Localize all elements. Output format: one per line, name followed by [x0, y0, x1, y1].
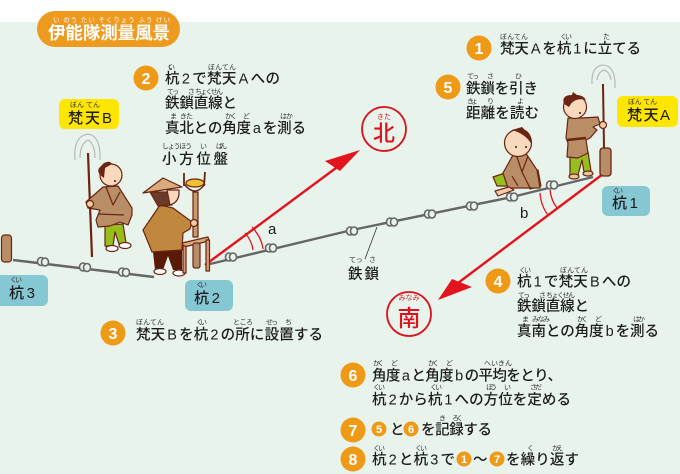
south circle: みなみ [398, 294, 420, 302]
south circle: 南 [398, 305, 420, 331]
step 2: ど [243, 112, 250, 120]
step 6: かく [373, 360, 384, 368]
label: stake 3 [0, 275, 48, 306]
figure: seated man with chain [493, 127, 541, 196]
label: bonten A: 梵天A [627, 107, 670, 124]
figure: surveyor with compass [143, 172, 210, 276]
chain label with leader: さ [369, 256, 376, 264]
step 8: かえ [552, 444, 563, 452]
label: stake 2: 杭 2 [194, 290, 220, 307]
chain label with leader: てっ [349, 257, 363, 264]
step 5: 鉄鎖を引き [466, 80, 538, 98]
step 5: よ [517, 98, 524, 106]
label: stake 1: くい [612, 187, 623, 195]
stake 3 [2, 235, 12, 262]
step 5: きょ [467, 98, 478, 106]
figure: man holding bonten B [75, 134, 132, 257]
south circle [387, 292, 431, 336]
step 8: 1 [461, 454, 467, 466]
angle b arcs [540, 190, 557, 215]
step 1 [466, 33, 641, 60]
step 5: 5 [444, 80, 453, 97]
step 8: を繰り返す [506, 452, 579, 468]
step 4 [486, 266, 659, 340]
step 4: 真南との角度bを測る [517, 322, 659, 340]
step 8: くい [415, 444, 427, 452]
step 2: かく [225, 112, 237, 120]
step 4: くい [519, 266, 531, 274]
step 5: てっ [467, 74, 479, 80]
step 3: ぼんてん [136, 318, 164, 326]
step 4: ど [595, 316, 602, 324]
step 4: みなみ [532, 316, 550, 324]
label: bonten B [59, 99, 119, 129]
label: stake 1 [602, 186, 650, 216]
step 2: 真北との角度aを測る [165, 119, 306, 137]
north circle: 北 [373, 121, 395, 146]
label: stake 3: 杭 3 [9, 285, 35, 302]
step 5: 距離を読む [466, 105, 539, 122]
label: stake 3: くい [10, 276, 22, 284]
step 4: ま [522, 316, 529, 324]
angle label b: b [520, 205, 528, 222]
step 5 [436, 72, 539, 122]
step 7 [340, 414, 492, 442]
step 6: ど [446, 360, 453, 368]
step 4: さ [539, 292, 546, 300]
step 7: 7 [349, 423, 358, 440]
red arrow to north [205, 150, 360, 265]
step 3: くい [196, 318, 207, 326]
step 3: ところ [233, 318, 253, 326]
north circle: きた [377, 113, 391, 121]
step 8: くい [373, 444, 385, 452]
label: stake 2: くい [196, 281, 207, 289]
step 6: 杭2から杭1への方位を定める [372, 392, 571, 408]
step 8: く [527, 444, 534, 452]
step 4: ぼんてん [560, 266, 588, 274]
step 3: ち [285, 318, 292, 326]
step 6: ほう [486, 384, 497, 392]
step 3 [100, 318, 323, 346]
title badge: い のう たい そくりょう ふう けい [53, 16, 170, 24]
label: compass: ばん [216, 142, 227, 150]
angle label a: a [268, 221, 277, 238]
chain label with leader: 鉄鎖 [348, 266, 380, 283]
step 8: 7 [494, 454, 500, 466]
step 6 [340, 360, 571, 408]
step 1: 梵天Aを杭1に立てる [500, 40, 641, 58]
step 6: へいきん [484, 360, 512, 368]
step 6: 6 [349, 368, 358, 385]
step 2: 鉄鎖直線と [165, 95, 237, 112]
title badge: 伊能隊測量風景 [48, 23, 170, 43]
step 7: 5 [376, 424, 382, 436]
step 2: 2 [142, 71, 151, 88]
step 7: と [390, 422, 404, 438]
step 2: ちょくせん [195, 88, 223, 96]
step 2: きた [180, 112, 193, 120]
step 2: はか [280, 112, 293, 120]
step 2: てっ [167, 89, 179, 96]
step 6: さだ [530, 384, 542, 392]
step 6: くい [430, 384, 442, 392]
step 4: 鉄鎖直線と [517, 298, 589, 315]
angle a arcs [245, 227, 263, 250]
chain: left section [13, 258, 154, 277]
chain: main section [210, 177, 593, 264]
step 1: ぼんてん [500, 33, 528, 41]
step 6: 角度aと角度bの平均をとり、 [372, 368, 562, 384]
step 4: かく [577, 316, 588, 324]
step 7: を記録する [421, 422, 492, 438]
step 6: い [504, 384, 511, 392]
step 1: くい [560, 33, 572, 41]
north circle [362, 107, 406, 151]
step 3: 梵天Bを杭2の所に設置する [136, 326, 323, 344]
step 6: かく [428, 360, 439, 368]
chain label with leader [348, 227, 380, 283]
step 6: くい [373, 384, 385, 392]
step 7: き [439, 414, 446, 422]
label: bonten A [617, 96, 678, 127]
label: compass: い [200, 142, 207, 150]
step 2: 杭2で梵天Aへの [165, 70, 280, 88]
label: bonten B: ぼん てん [70, 101, 100, 109]
step 5: さ [487, 72, 494, 80]
red arrow to south [438, 174, 603, 300]
step 8: 杭2と杭3で [372, 452, 455, 468]
step 8: 8 [349, 452, 358, 469]
step 2 [134, 64, 306, 137]
step 2: ぼんてん [208, 64, 236, 72]
step 1: た [603, 33, 610, 41]
label: bonten A: ぼん てん [628, 98, 657, 106]
step 3: 3 [109, 326, 118, 343]
step 2: ま [170, 112, 177, 120]
label: bonten B: 梵天B [68, 110, 112, 127]
step 7: 6 [408, 424, 414, 436]
label: compass: 小方位盤 [162, 151, 228, 168]
step 2: さ [188, 88, 195, 96]
label: compass [162, 142, 228, 168]
title badge [37, 11, 180, 47]
step 4: てっ [518, 292, 530, 300]
figure: man holding bonten A with stake 1 [563, 65, 615, 179]
step 4: 4 [494, 274, 503, 291]
label: stake 2 [185, 280, 233, 311]
step 1: 1 [475, 41, 484, 58]
step 8: 〜 [473, 452, 488, 468]
step 8 [340, 444, 579, 472]
step 4: はか [633, 316, 645, 324]
step 2: くい [167, 64, 175, 72]
label: stake 1: 杭 1 [612, 195, 638, 212]
label: compass: しょうほう [162, 142, 192, 150]
step 6: ど [391, 360, 398, 368]
step 4: 杭1で梵天Bへの [517, 274, 631, 290]
step 5: り [487, 98, 494, 106]
step 4: ちょくせん [546, 292, 575, 300]
step 5: ひ [515, 72, 522, 80]
step 3: せっ [266, 318, 278, 326]
step 7: ろく [452, 414, 463, 422]
